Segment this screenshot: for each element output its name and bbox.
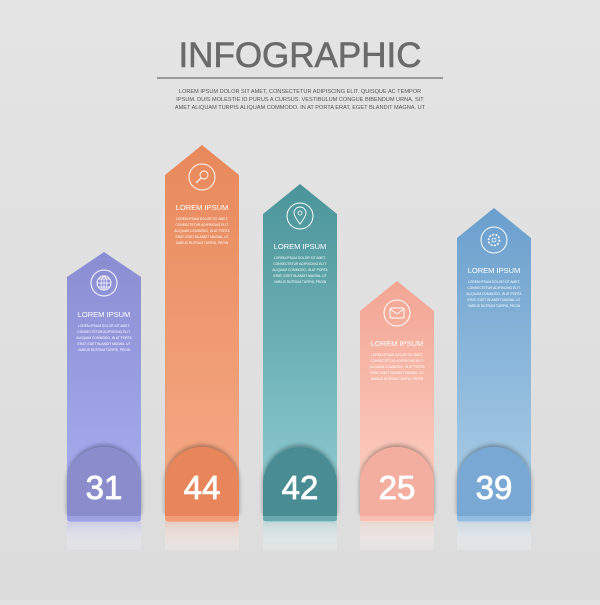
column 3: 42: LOREM IPSUM DOLOR SIT AMET, [274, 256, 326, 260]
column 4: 25: VARIUS RUTRUM TURPIS, PROIN [371, 377, 424, 381]
column 4: 25: LOREM IPSUM DOLOR SIT AMET, [371, 353, 423, 357]
column 4: 25 [360, 281, 434, 550]
column 2: 44 [165, 145, 239, 550]
column 2: 44: ALIQUAM COMMODO, IN AT PORTA [174, 229, 231, 233]
column 4: 25: CONSECTETUR ADIPISCING ELIT. [370, 359, 424, 363]
column 1: 31: ALIQUAM COMMODO, IN AT PORTA [76, 336, 133, 340]
intro text [175, 89, 426, 111]
column 3: 42: VARIUS RUTRUM TURPIS, PROIN [274, 280, 327, 284]
column 5: 39: 39 [476, 469, 512, 506]
column 4: 25: LOREM IPSUM [371, 339, 423, 348]
column 1: 31: CONSECTETUR ADIPISCING ELIT. [77, 330, 131, 334]
column 3: 42: 42 [282, 469, 318, 506]
column 5: 39: LOREM IPSUM [468, 266, 520, 275]
column 5: 39: CONSECTETUR ADIPISCING ELIT. [467, 286, 521, 290]
column 1: 31 [67, 252, 141, 550]
intro text: LOREM IPSUM DOLOR SIT AMET, CONSECTETUR ADIPISCING ELIT. QUISQUE AC TEMPOR [179, 89, 421, 95]
column 5: 39: ERAT, EGET BLANDIT MAGNA. UT [468, 298, 520, 302]
column 3: 42: ALIQUAM COMMODO, IN AT PORTA [272, 268, 329, 272]
column 4: 25: ERAT, EGET BLANDIT MAGNA. UT [371, 371, 423, 375]
column 2: 44: VARIUS RUTRUM TURPIS, PROIN [176, 241, 229, 245]
column 2: 44: ERAT, EGET BLANDIT MAGNA. UT [176, 235, 228, 239]
title: INFOGRAPHIC [178, 36, 422, 75]
column 5: 39 [457, 208, 531, 550]
intro text: AMET ALIQUAM TURPIS ALIQUAM COMMODO. IN AT PORTA ERAT, EGET BLANDIT MAGNA. UT [175, 105, 426, 111]
column 1: 31: LOREM IPSUM DOLOR SIT AMET, [78, 324, 130, 328]
column 1: 31: LOREM IPSUM [78, 310, 130, 319]
column 3: 42: LOREM IPSUM [274, 242, 326, 251]
column 3: 42: ERAT, EGET BLANDIT MAGNA. UT [274, 274, 326, 278]
column 3: 42: CONSECTETUR ADIPISCING ELIT. [273, 262, 327, 266]
column 4: 25: 25 [379, 469, 415, 506]
column 5: 39: ALIQUAM COMMODO, IN AT PORTA [466, 292, 523, 296]
column 1: 31: VARIUS RUTRUM TURPIS, PROIN [78, 348, 131, 352]
column 4: 25: ALIQUAM COMMODO, IN AT PORTA [369, 365, 426, 369]
column 3: 42 [263, 184, 337, 550]
column 2: 44: 44 [184, 469, 220, 506]
intro text: IPSUM. DUIS MOLESTIE ID PURUS A CURSUS. VESTIBULUM CONGUE BIBENDUM URNA, SIT [176, 97, 424, 103]
column 2: 44: CONSECTETUR ADIPISCING ELIT. [175, 223, 229, 227]
column 5: 39: LOREM IPSUM DOLOR SIT AMET, [468, 280, 520, 284]
column 5: 39: VARIUS RUTRUM TURPIS, PROIN [468, 304, 521, 308]
column 1: 31: ERAT, EGET BLANDIT MAGNA. UT [78, 342, 130, 346]
column 2: 44: LOREM IPSUM DOLOR SIT AMET, [176, 217, 228, 221]
column 2: 44: LOREM IPSUM [176, 203, 228, 212]
column 1: 31: 31 [86, 469, 122, 506]
